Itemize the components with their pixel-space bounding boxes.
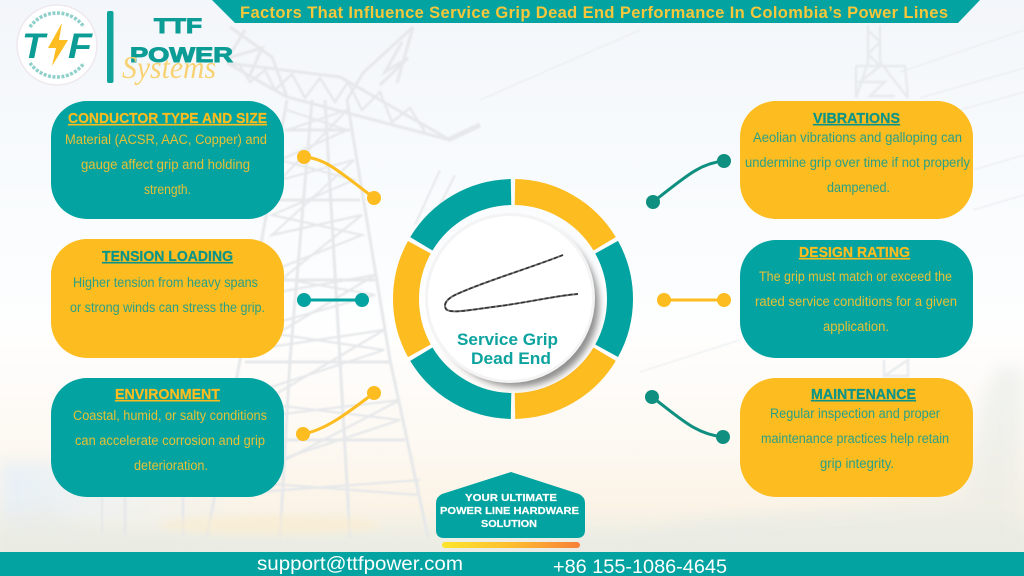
connector: maintenance to ring xyxy=(645,390,730,444)
heading: VIBRATIONS xyxy=(813,111,900,127)
logo xyxy=(17,5,233,85)
centre disc with product xyxy=(425,213,599,387)
tagline badge xyxy=(436,472,585,538)
company name: Systems xyxy=(122,49,216,85)
heading: CONDUCTOR TYPE AND SIZE xyxy=(68,111,267,127)
body text xyxy=(73,408,267,473)
product name: Service Grip xyxy=(457,330,558,349)
product name: Dead End xyxy=(471,349,551,368)
central ring of six segments xyxy=(367,153,659,445)
body text xyxy=(65,132,267,197)
tagline text: POWER LINE HARDWARE xyxy=(440,505,579,517)
connector: conductor type to ring xyxy=(297,150,381,205)
body text: strength. xyxy=(144,182,191,197)
logo badge: F xyxy=(68,27,94,66)
body text: maintenance practices help retain xyxy=(761,431,949,446)
heading: TENSION LOADING xyxy=(102,249,233,265)
body text xyxy=(745,130,970,195)
connector: design rating to ring xyxy=(657,293,731,307)
tagline text: SOLUTION xyxy=(481,518,537,530)
heading: MAINTENANCE xyxy=(811,387,916,403)
company name xyxy=(122,15,233,85)
email: support@ttfpower.com xyxy=(257,554,463,575)
connector: tension loading to ring xyxy=(297,293,369,307)
title banner xyxy=(212,0,980,23)
body text: deterioration. xyxy=(134,458,208,473)
body text: Regular inspection and proper xyxy=(770,406,940,421)
panel: conductor type and size xyxy=(51,101,284,219)
body text: Aeolian vibrations and galloping can xyxy=(753,130,962,145)
panel: environment xyxy=(51,378,284,497)
title: Factors That Influence Service Grip Dead End Performance In Colombia’s Power Lines xyxy=(240,4,948,22)
body text: The grip must match or exceed the xyxy=(759,269,952,284)
body text: Coastal, humid, or salty conditions xyxy=(73,408,267,423)
body text xyxy=(761,406,949,471)
body text: gauge affect grip and holding xyxy=(81,157,250,172)
panel: tension loading xyxy=(51,239,284,358)
body text: application. xyxy=(823,319,889,334)
connector: environment to ring xyxy=(296,386,381,441)
logo divider xyxy=(107,11,114,83)
body text xyxy=(70,275,265,315)
panel: maintenance xyxy=(740,378,973,497)
connector: vibrations to ring xyxy=(646,154,731,209)
tagline text: YOUR ULTIMATE xyxy=(465,492,557,504)
heading: ENVIRONMENT xyxy=(115,387,220,403)
body text: rated service conditions for a given xyxy=(755,294,957,309)
tagline text xyxy=(440,492,579,530)
icon: service grip wire xyxy=(445,255,578,311)
tagline gradient bar xyxy=(442,542,580,548)
company name: POWER xyxy=(130,44,233,67)
heading: DESIGN RATING xyxy=(799,245,910,261)
body text: Higher tension from heavy spans xyxy=(73,275,258,290)
body text: can accelerate corrosion and grip xyxy=(75,433,265,448)
body text xyxy=(755,269,957,334)
panel: vibrations xyxy=(740,101,973,219)
body text: dampened. xyxy=(827,180,890,195)
body text: Material (ACSR, AAC, Copper) and xyxy=(65,132,267,147)
body text: undermine grip over time if not properly xyxy=(745,155,970,170)
logo badge: T xyxy=(22,27,48,66)
panel: design rating xyxy=(740,240,973,358)
product name xyxy=(457,330,558,368)
company name: TTF xyxy=(154,15,202,38)
footer bar xyxy=(0,552,1024,576)
body text: or strong winds can stress the grip. xyxy=(70,300,265,315)
body text: grip integrity. xyxy=(820,456,894,471)
logo badge xyxy=(17,5,97,85)
